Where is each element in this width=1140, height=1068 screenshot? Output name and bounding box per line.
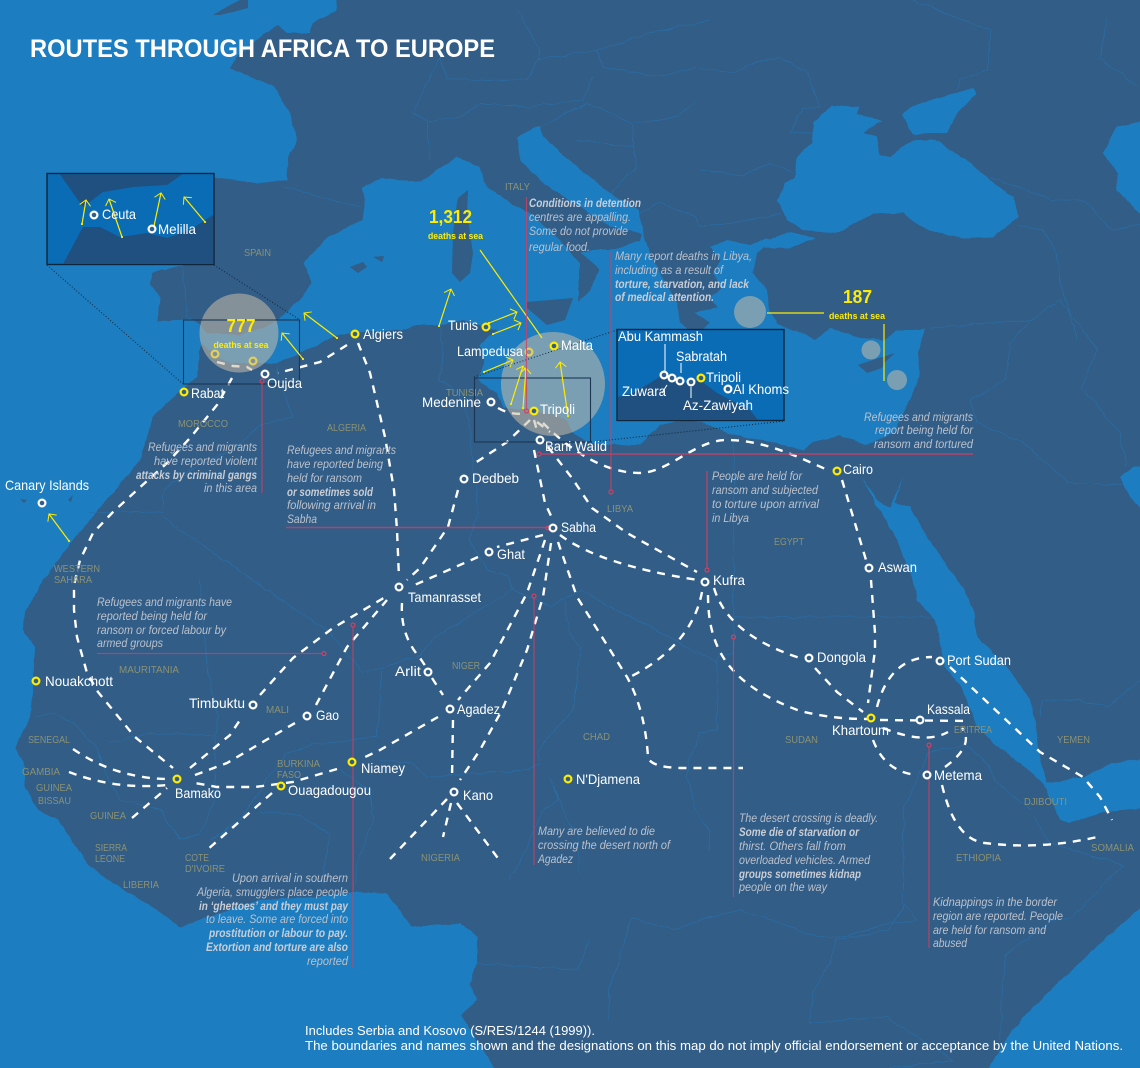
stat: 187 deaths at sea: 187	[843, 287, 872, 307]
annotation line: desert crossing	[732, 635, 736, 897]
city: Ghat	[486, 546, 525, 562]
arrow: inset crossing 1	[82, 200, 86, 224]
annotation: Sabha ransom: or sometimes sold	[287, 485, 374, 499]
annotation: detention conditions	[529, 196, 641, 254]
annotation: armed groups	[97, 595, 232, 650]
city: Sabha	[550, 519, 596, 535]
arrow: Libya to Lampedusa 1	[511, 366, 523, 404]
city: Port Sudan: Port Sudan	[947, 652, 1011, 668]
annotation: detention conditions: Some do not provide	[529, 224, 628, 238]
annotation line: north of Agadez	[532, 594, 536, 865]
footnote	[305, 1023, 1123, 1053]
city: Kufra: Kufra	[713, 572, 745, 588]
annotation: deaths in Libya	[615, 249, 752, 304]
annotation: detention conditions: centres are appalling.	[529, 210, 631, 224]
country labels: YEMEN	[1057, 735, 1090, 746]
annotation: Sabha ransom: held for ransom	[287, 471, 362, 485]
city: Nouakchott: Nouakchott	[45, 673, 113, 689]
city: Dedbeb: Dedbeb	[472, 470, 519, 486]
city: Canary Islands	[5, 477, 89, 506]
annotation line: Sabha	[286, 526, 550, 530]
annotation: desert north of Agadez	[537, 824, 672, 866]
annotation: ransom and torture: report being held for	[875, 423, 974, 437]
annotation: Sabha ransom: Sabha	[287, 512, 317, 526]
country labels: WESTERN	[54, 564, 100, 575]
country labels: CHAD	[583, 732, 610, 743]
country labels: FASO	[277, 770, 301, 781]
country labels: NIGER	[452, 661, 480, 672]
annotation line: Kufra	[705, 471, 709, 572]
city: Agadez: Agadez	[457, 701, 500, 717]
country labels: D'IVOIRE	[185, 864, 225, 875]
annotation: deaths in Libya: of medical attention.	[615, 290, 714, 304]
city: Kassala: Kassala	[927, 701, 970, 717]
label: Abu Kammash: Abu Kammash	[618, 328, 703, 344]
annotation: held for ransom in Libya: People are held for	[712, 469, 803, 483]
city: Ghat: Ghat	[497, 546, 525, 562]
country labels: ERITREA	[954, 725, 992, 736]
arrow: Algiers to Spain	[304, 313, 337, 338]
annotation: border kidnappings	[933, 895, 1063, 950]
city: Rabat	[181, 385, 224, 401]
city: Gao: Gao	[316, 707, 339, 723]
annotation line: Oujda	[260, 379, 264, 493]
annotation: southern Algeria ghettoes: Algeria, smugglers place people	[196, 885, 348, 899]
city: Ouagadougou: Ouagadougou	[288, 782, 371, 798]
country labels: NIGERIA	[421, 853, 460, 864]
city: Malta: Malta	[561, 337, 593, 353]
annotation: border kidnappings: are held for ransom and	[933, 923, 1046, 937]
arrow: Algeria to Spain	[282, 333, 303, 359]
city: Canary Islands: Canary Islands	[5, 477, 89, 493]
bubble: deaths at sea, Aegean	[734, 296, 766, 328]
annotation line: southern Algeria	[351, 623, 355, 967]
dotted connectors to insets	[47, 265, 785, 442]
city: Bamako: Bamako	[175, 785, 221, 801]
annotation: southern Algeria ghettoes: to leave. Some are forced into	[206, 912, 348, 926]
country labels: DJIBOUTI	[1024, 797, 1067, 808]
country labels: SENEGAL	[28, 735, 70, 746]
city: Arlit	[395, 663, 431, 679]
annotation: Sabha ransom: following arrival in	[287, 498, 376, 512]
arrow: Tripoli to Malta	[560, 362, 568, 416]
arrow: Canary Islands route	[49, 514, 69, 541]
country labels: GUINEA	[90, 811, 126, 822]
city: Kano	[451, 787, 493, 803]
title: ROUTES THROUGH AFRICA TO EUROPE	[30, 35, 495, 63]
annotation: deaths in Libya: including as a result of	[615, 263, 725, 277]
city: Sabha: Sabha	[561, 519, 596, 535]
country labels: SPAIN	[244, 248, 271, 259]
stat: 777 deaths at sea: deaths at sea	[214, 340, 269, 351]
bubble: deaths at sea, central Mediterranean	[501, 332, 605, 436]
annotation: detention conditions: regular food.	[529, 240, 590, 254]
leader: 1,312 deaths	[480, 250, 542, 338]
annotation line: detention centres	[524, 197, 528, 413]
city: Niamey: Niamey	[361, 760, 405, 776]
country labels: SUDAN	[785, 735, 818, 746]
annotation line: deaths in Libya	[609, 251, 613, 494]
annotation: border kidnappings: Kidnappings in the border	[933, 895, 1058, 909]
routes: dashed migration routes	[69, 343, 1112, 861]
country labels: TUNISIA	[446, 388, 483, 399]
city: Metema: Metema	[934, 767, 982, 783]
annotation: detention conditions: Conditions in detention	[529, 196, 641, 210]
annotation: deadly desert crossing: The desert crossing is deadly.	[739, 811, 878, 825]
arrow: inset crossing 2	[109, 199, 122, 237]
city: Aswan: Aswan	[878, 559, 917, 575]
country labels: SOMALIA	[1091, 843, 1134, 854]
country labels: COTE	[185, 853, 209, 864]
annotation: deadly desert crossing	[738, 811, 878, 894]
city: Melilla: Melilla	[158, 221, 196, 237]
leader: 187 deaths horizontal	[767, 312, 824, 314]
city: Ceuta: Ceuta	[102, 206, 136, 222]
country labels: LEONE	[95, 854, 125, 865]
country labels: SAHARA	[54, 575, 92, 586]
country labels: BURKINA	[277, 759, 320, 770]
arrow: Tunis to Sicily lower	[493, 323, 521, 334]
annotation line: Bani Walid to east	[537, 452, 973, 456]
annotation: Morocco attacks: in this area	[204, 481, 257, 495]
city: Algiers: Algiers	[363, 326, 403, 342]
annotation: Morocco attacks: attacks by criminal gangs	[136, 468, 257, 482]
annotation: Sabha ransom	[287, 443, 396, 526]
city: Tunis: Tunis	[448, 317, 478, 333]
inset: Ceuta and Melilla	[47, 174, 214, 264]
city: Tamanrasset: Tamanrasset	[408, 589, 481, 605]
country labels: MALI	[266, 705, 289, 716]
annotation: ransom and torture	[864, 410, 974, 451]
annotation: southern Algeria ghettoes	[196, 871, 349, 968]
annotation: Morocco attacks	[136, 440, 258, 495]
stat: 187 deaths at sea	[829, 287, 886, 322]
arrow: Libya to Lampedusa 2	[523, 368, 526, 408]
locator box: Morocco	[184, 320, 300, 384]
annotation: armed groups: ransom or forced labour by	[97, 623, 227, 637]
bubble: deaths at sea, Cyprus south	[887, 370, 907, 390]
annotation: southern Algeria ghettoes: prostitution or labour to pay.	[208, 926, 348, 940]
arrow: Tunis to Sicily upper	[489, 312, 517, 323]
stat: 777 deaths at sea	[214, 316, 269, 351]
city: Tamanrasset	[396, 584, 481, 605]
stat: 777 deaths at sea: 777	[226, 316, 256, 336]
country labels: MAURITANIA	[119, 665, 179, 676]
locator box: Libya	[474, 378, 590, 442]
city: Khartoum: Khartoum	[832, 722, 889, 738]
arrow: inset crossing 3	[154, 193, 161, 226]
annotation: ransom and torture: Refugees and migrants	[864, 410, 973, 424]
annotation: Sabha ransom: Refugees and migrants	[287, 443, 396, 457]
country labels: ITALY	[505, 182, 530, 193]
annotation: armed groups: reported being held for	[97, 609, 208, 623]
city: N'Djamena: N'Djamena	[576, 771, 640, 787]
annotation: held for ransom in Libya: to torture upon arrival	[712, 497, 819, 511]
city: Niamey	[349, 759, 405, 776]
bubble: deaths at sea, western Mediterranean	[200, 294, 278, 372]
country labels: BISSAU	[38, 796, 71, 807]
label: Al Khoms: Al Khoms	[733, 381, 789, 397]
annotation: southern Algeria ghettoes: reported	[307, 954, 348, 968]
stat: 187 deaths at sea: deaths at sea	[829, 311, 886, 322]
country labels: GAMBIA	[22, 767, 60, 778]
country labels: ETHIOPIA	[956, 853, 1001, 864]
node: route stops under the 777 bubble	[212, 349, 532, 364]
city: Bamako	[174, 776, 221, 801]
annotation line: armed groups	[97, 652, 326, 656]
arrow: inset crossing 4	[184, 197, 205, 222]
city: Dongola: Dongola	[817, 649, 866, 665]
country labels: ALGERIA	[327, 423, 366, 434]
city: Kano: Kano	[463, 787, 493, 803]
annotation: ransom and torture: ransom and tortured	[874, 437, 973, 451]
label: inset Tripoli: Tripoli	[706, 369, 741, 385]
country labels	[22, 182, 1134, 891]
annotation: desert north of Agadez: crossing the desert north of	[538, 838, 672, 852]
bubble: deaths at sea, Cyprus north	[862, 340, 880, 360]
city: Tripoli: Tripoli	[540, 401, 575, 417]
annotation: held for ransom in Libya	[712, 469, 819, 525]
label: Lampedusa: Lampedusa	[457, 343, 523, 359]
city: Kassala	[917, 701, 970, 723]
label: Az-Zawiyah: Az-Zawiyah	[683, 397, 753, 413]
map: islands	[20, 0, 895, 503]
city: Oujda: Oujda	[267, 375, 302, 391]
country labels: EGYPT	[774, 537, 804, 548]
annotation: southern Algeria ghettoes: Upon arrival in southern	[232, 871, 348, 885]
city: Khartoum	[832, 715, 889, 738]
inset: Libyan coast	[617, 328, 789, 420]
annotation: armed groups: armed groups	[97, 636, 163, 650]
city: Cairo: Cairo	[843, 461, 873, 477]
annotation: deadly desert crossing: people on the way	[738, 880, 828, 894]
city: Medenine: Medenine	[422, 394, 481, 410]
stat: 1,312 deaths at sea: 1,312	[429, 207, 472, 227]
label: Zuwara: Zuwara	[622, 383, 666, 399]
leader: 187 deaths vertical	[883, 324, 885, 381]
footnote: The boundaries and names shown and the designations on this map do not imply official endorsement or acceptance by the United Nations.	[305, 1038, 1123, 1053]
city: Rabat: Rabat	[191, 385, 224, 401]
annotation: border kidnappings: abused	[933, 936, 967, 950]
city: Gao	[304, 707, 339, 723]
city: Bani Walid: Bani Walid	[545, 438, 607, 454]
annotation: Sabha ransom: have reported being	[287, 457, 383, 471]
annotation: desert north of Agadez: Many are believed to die	[538, 824, 655, 838]
annotation: held for ransom in Libya: ransom and subjected	[712, 483, 818, 497]
country labels: SIERRA	[95, 843, 127, 854]
stat: 1,312 deaths at sea: deaths at sea	[428, 231, 484, 242]
annotation: border kidnappings: region are reported. People	[933, 909, 1063, 923]
country labels: LIBYA	[607, 504, 633, 515]
label: Sabratah: Sabratah	[676, 348, 727, 364]
annotation: deadly desert crossing: groups sometimes kidnap	[738, 867, 861, 881]
annotation: deadly desert crossing: overloaded vehicles. Armed	[739, 853, 870, 867]
city: Timbuktu: Timbuktu	[189, 695, 245, 711]
arrow: Tunisia to Lampedusa	[484, 360, 513, 372]
annotation: deaths in Libya: Many report deaths in Libya,	[615, 249, 752, 263]
annotation: deaths in Libya: torture, starvation, and lack	[615, 277, 750, 291]
annotation: deadly desert crossing: Some die of starvation or	[739, 825, 860, 839]
annotation: desert north of Agadez: Agadez	[537, 852, 573, 866]
city: Oujda	[262, 371, 302, 391]
annotation: Morocco attacks: have reported violent	[154, 454, 258, 468]
country labels: GUINEA	[36, 783, 72, 794]
annotation: armed groups: Refugees and migrants have	[97, 595, 232, 609]
stat: 1,312 deaths at sea	[428, 207, 484, 242]
annotation: held for ransom in Libya: in Libya	[712, 511, 749, 525]
annotation: Morocco attacks: Refugees and migrants	[148, 440, 257, 454]
city: Arlit: Arlit	[395, 663, 421, 679]
country labels: LIBERIA	[123, 880, 159, 891]
arrow: Tunisia to Sardinia	[439, 289, 451, 326]
annotation: deadly desert crossing: thirst. Others fall from	[739, 839, 846, 853]
annotation: southern Algeria ghettoes: Extortion and torture are also	[206, 940, 348, 954]
footnote: Includes Serbia and Kosovo (S/RES/1244 (1999)).	[305, 1023, 595, 1038]
annotation line: border kidnappings	[927, 743, 931, 948]
country labels: MOROCCO	[178, 419, 228, 430]
annotation: southern Algeria ghettoes: in ‘ghettoes’ and they must pay	[199, 899, 349, 913]
